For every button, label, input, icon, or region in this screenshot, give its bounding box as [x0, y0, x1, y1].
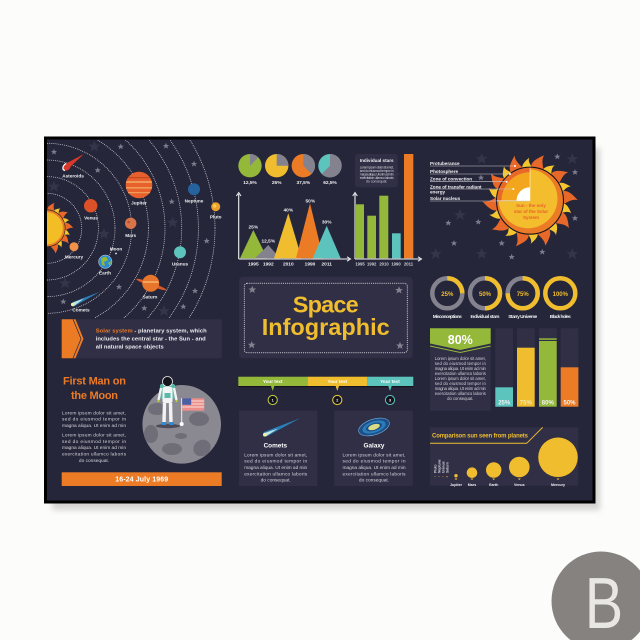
- panel: comets card: Lorem ipsum dolor sit amet,: [244, 452, 307, 458]
- callout: individual stars: do consequat.: [366, 180, 387, 184]
- labels: sun structure: Zone of convection: [430, 177, 472, 182]
- decorative stars around sun: [430, 153, 578, 260]
- labels: sun structure: Photosphere: [430, 169, 459, 174]
- sun size circles: [454, 437, 578, 480]
- panel: 80% note: magna aliqua. Ut enim ad min: [435, 386, 486, 391]
- text block: moon lorem: Lorem ipsum dolor sit amet,: [62, 433, 126, 439]
- icon and label: Pluto: [210, 202, 222, 220]
- panel: comparison sun seen from planets: Jupiter: [450, 483, 463, 487]
- panel: main title: [239, 277, 413, 358]
- icon and label: Venus: [84, 199, 98, 220]
- icon and label: Jupiter: [126, 172, 152, 206]
- panel: galaxy card: sed do eiusmod tempor in: [342, 459, 406, 465]
- panel: 80% note: exercitation ullamco laboris: [435, 391, 486, 396]
- callout: individual stars: Lorem ipsum dolor sit amet,: [360, 166, 394, 170]
- chart: triangle area chart: 1995: [248, 262, 259, 268]
- chart: triangle area chart: 1990: [305, 262, 316, 268]
- panel: comparison sun seen from planets: Saturn: [446, 462, 450, 473]
- pie charts: [238, 154, 342, 186]
- timeline bar: Your text: [328, 379, 348, 384]
- chart: triangle area chart: 2011: [321, 262, 332, 268]
- title: Space: [293, 291, 359, 317]
- callout: individual stars: exercitation ullamco laboris: [360, 176, 394, 180]
- pie: 12.5%: 12,5%: [243, 180, 258, 186]
- frame shadow: [52, 148, 600, 510]
- date banner: [62, 472, 222, 486]
- pie: 37.5%: 37,5%: [296, 180, 311, 186]
- icon: astronaut: [157, 376, 178, 425]
- chart: triangle area chart: 30%: [322, 220, 332, 226]
- timeline bar: [238, 377, 413, 405]
- panel: galaxy card: exercitation ullamco laboris: [342, 471, 406, 477]
- panel: comets card: [239, 411, 317, 486]
- panel: comparison sun seen from planets: Mars: [468, 483, 476, 487]
- labels: sun structure: Protuberance: [430, 161, 460, 166]
- text block: moon lorem: sed do eiusmod tempor in: [62, 417, 126, 423]
- callout: individual stars: [355, 154, 400, 187]
- chart: triangle area chart: [236, 192, 350, 268]
- panel: comets card: do consequat.: [261, 478, 291, 484]
- timeline bar: 2: [336, 398, 338, 402]
- text block: moon lorem: Lorem ipsum dolor sit amet,: [62, 410, 126, 416]
- heading: First Man on the Moon: First Man on: [63, 376, 126, 388]
- panel: comparison sun seen from planets: [430, 427, 578, 487]
- donut: Starry Universe 75%: Starry Universe: [508, 314, 538, 320]
- chart: percentage column bars: 25%: [498, 400, 511, 406]
- icon and label: Uranus: Uranus: [172, 262, 188, 266]
- illustration: sun cross-section: System: [523, 215, 539, 220]
- callout: individual stars: magna aliqua. Ut enim ad min: [360, 172, 394, 176]
- icon and label: Mercury: Mercury: [65, 254, 84, 260]
- panel: galaxy card: Lorem ipsum dolor sit amet,: [342, 452, 406, 458]
- timeline bar: Your text: [263, 379, 283, 384]
- callout: individual stars: sed do eiusmod tempor in: [360, 169, 394, 173]
- panel: 80% note: exercitation ullamco laboris: [435, 371, 486, 376]
- framed poster: [46, 138, 594, 502]
- icon and label: Earth: Earth: [99, 270, 111, 276]
- chart: triangle area chart: 12,5%: [261, 238, 276, 244]
- chart: percentage column bars: 75%: [520, 400, 532, 406]
- icon and label: comets: [71, 292, 100, 312]
- panel: comparison sun seen from planets: Venus: [514, 483, 525, 487]
- donut: Individual stars 50%: [470, 278, 500, 320]
- panel: galaxy card: do consequat.: [359, 478, 389, 484]
- labels: sun structure: Zone of transfer radiant: [430, 184, 482, 190]
- icon: small sun: [28, 202, 74, 254]
- chart: bar chart by year: 1990: [391, 262, 401, 266]
- donut: Black holes 100%: [545, 278, 575, 320]
- icon and label: Moon: [110, 246, 122, 254]
- chart: percentage column bars: [495, 328, 578, 407]
- text block: moon lorem: magna aliqua. Ut enim ad min: [62, 445, 126, 451]
- panel: 80% note: [430, 328, 491, 411]
- illustration: sun cross-section: Sun - the only: [516, 203, 546, 208]
- icon and label: Pluto: Pluto: [210, 214, 222, 220]
- timeline bar: 1: [272, 398, 274, 402]
- heading: First Man on the Moon: the Moon: [71, 390, 118, 402]
- chart: bar chart by year: 1992: [367, 262, 377, 266]
- donut charts: [432, 278, 575, 320]
- icon and label: Mars: Mars: [125, 233, 137, 238]
- icon: flag: [180, 398, 204, 426]
- icon: galaxy: [356, 415, 392, 439]
- panel: comparison sun seen from planets: Comparison sun seen from planets: [432, 434, 529, 440]
- donut: Starry Universe 75%: 75%: [517, 292, 529, 298]
- panel: comets card: Comets: [264, 442, 287, 450]
- panel: solar system note: all natural space objects: [96, 344, 164, 350]
- donut: Misconceptions 25%: Misconceptions: [433, 314, 462, 320]
- donut: Individual stars 50%: 50%: [479, 292, 492, 298]
- panel: comparison sun seen from planets: Earth: [489, 483, 498, 487]
- text block: moon lorem: sed do eiusmod tempor in: [62, 439, 126, 445]
- icon and label: Jupiter: Jupiter: [131, 200, 147, 206]
- icon and label: Neptune: Neptune: [185, 198, 204, 204]
- panel: comets card: exercitation ullamco laboris: [244, 471, 308, 477]
- panel: 80% note: do consequat.: [447, 396, 473, 401]
- pie: 25%: 25%: [272, 180, 282, 186]
- labels: sun structure: Solar nucleus: [430, 196, 461, 201]
- illustration: sun cross-section: [482, 153, 578, 248]
- panel: 80% note: sed do eiusmod tempor in: [435, 361, 486, 366]
- heading: First Man on the Moon: [63, 376, 126, 402]
- timeline bar: Your text: [380, 379, 400, 384]
- icon and label: Saturn: Saturn: [143, 294, 158, 300]
- chart: triangle area chart: 1992: [263, 262, 274, 268]
- panel: solar system note: includes the central star - the Sun - and: [96, 336, 206, 342]
- icon and label: asteroids: [62, 154, 84, 178]
- icon and label: Mercury: [65, 242, 84, 260]
- title: Infographic: [262, 314, 390, 340]
- donut: Starry Universe 75%: [508, 278, 538, 320]
- icon: comet: [263, 418, 300, 437]
- date banner: 16-24 July 1969: [115, 477, 168, 484]
- icon and label: Earth: [99, 255, 112, 276]
- panel: 80% note: 80%: [448, 333, 473, 347]
- donut: Black holes 100%: 100%: [553, 292, 569, 298]
- donut: Misconceptions 25%: [432, 278, 462, 320]
- panel: 80% note: Lorem ipsum dolor sit amet,: [435, 376, 486, 381]
- icon and label: Moon: Moon: [110, 246, 122, 252]
- text block: moon lorem: exercitation ullamco laboris: [62, 452, 127, 458]
- panel: comets card: sed do eiusmod tempor in: [244, 459, 308, 465]
- chart: percentage column bars: 50%: [563, 400, 576, 406]
- panel: solar system note: Solar system - planetary system, which: [96, 329, 207, 335]
- text block: moon lorem: magna aliqua. Ut enim ad min: [62, 423, 126, 429]
- panel: solar system orbits: [47, 140, 216, 318]
- chart: triangle area chart: 40%: [283, 208, 294, 214]
- illustration: moon with astronaut and flag: [142, 376, 221, 464]
- panel: comets card: magna aliqua. Ut enim ad min: [244, 465, 308, 471]
- panel: comparison sun seen from planets: Uranus: [442, 461, 446, 473]
- chart: bar chart by year: [353, 154, 422, 266]
- donut: Misconceptions 25%: 25%: [441, 292, 454, 298]
- text block: moon lorem: [62, 410, 127, 464]
- badge: variant B: [552, 552, 640, 640]
- chart: triangle area chart: 2010: [283, 262, 294, 268]
- panel: comparison sun seen from planets: Mercury: [551, 483, 565, 487]
- panel: galaxy card: [334, 411, 413, 486]
- labels: sun structure: energy: [430, 190, 446, 194]
- text block: moon lorem: do consequat.: [79, 458, 109, 464]
- labels: sun structure: [430, 161, 530, 201]
- chart: triangle area chart: 50%: [305, 198, 316, 204]
- donut: Individual stars 50%: Individual stars: [470, 314, 500, 320]
- icon and label: comets: Comets: [72, 308, 90, 312]
- illustration: sun cross-section: star of the Solar: [514, 209, 548, 214]
- icon and label: Mars: [125, 218, 137, 238]
- panel: 80% note: sed do eiusmod tempor in: [435, 381, 486, 386]
- icon and label: asteroids: Asteroids: [62, 174, 84, 178]
- timeline bar: 3: [389, 398, 391, 402]
- panel: solar system note: [62, 319, 222, 358]
- chart: bar chart by year: 2010: [379, 262, 389, 266]
- chart: bar chart by year: 1995: [355, 262, 365, 266]
- icon and label: Uranus: [172, 246, 188, 266]
- panel: galaxy card: magna aliqua. Ut enim ad min: [342, 465, 406, 471]
- pie: 62.5%: 62,5%: [323, 180, 338, 186]
- panel: 80% note: Lorem ipsum dolor sit amet,: [435, 356, 486, 361]
- panel: 80% note: magna aliqua. Ut enim ad min: [435, 366, 486, 371]
- donut: Black holes 100%: Black holes: [550, 314, 571, 320]
- icon and label: Neptune: [185, 183, 204, 204]
- chart: percentage column bars: 80%: [542, 400, 554, 406]
- callout: individual stars: Individual stars: [360, 158, 394, 163]
- icon and label: Saturn: [136, 275, 167, 300]
- chart: bar chart by year: 2011: [404, 262, 414, 266]
- panel: galaxy card: Galaxy: [364, 442, 385, 450]
- icon and label: Venus: Venus: [84, 216, 98, 220]
- panel: comparison sun seen from planets: Neptune: [438, 459, 442, 473]
- chart: triangle area chart: 25%: [248, 224, 259, 230]
- panel: comparison sun seen from planets: Pluto: [434, 465, 438, 473]
- icon: orange chevron tag: [62, 319, 84, 358]
